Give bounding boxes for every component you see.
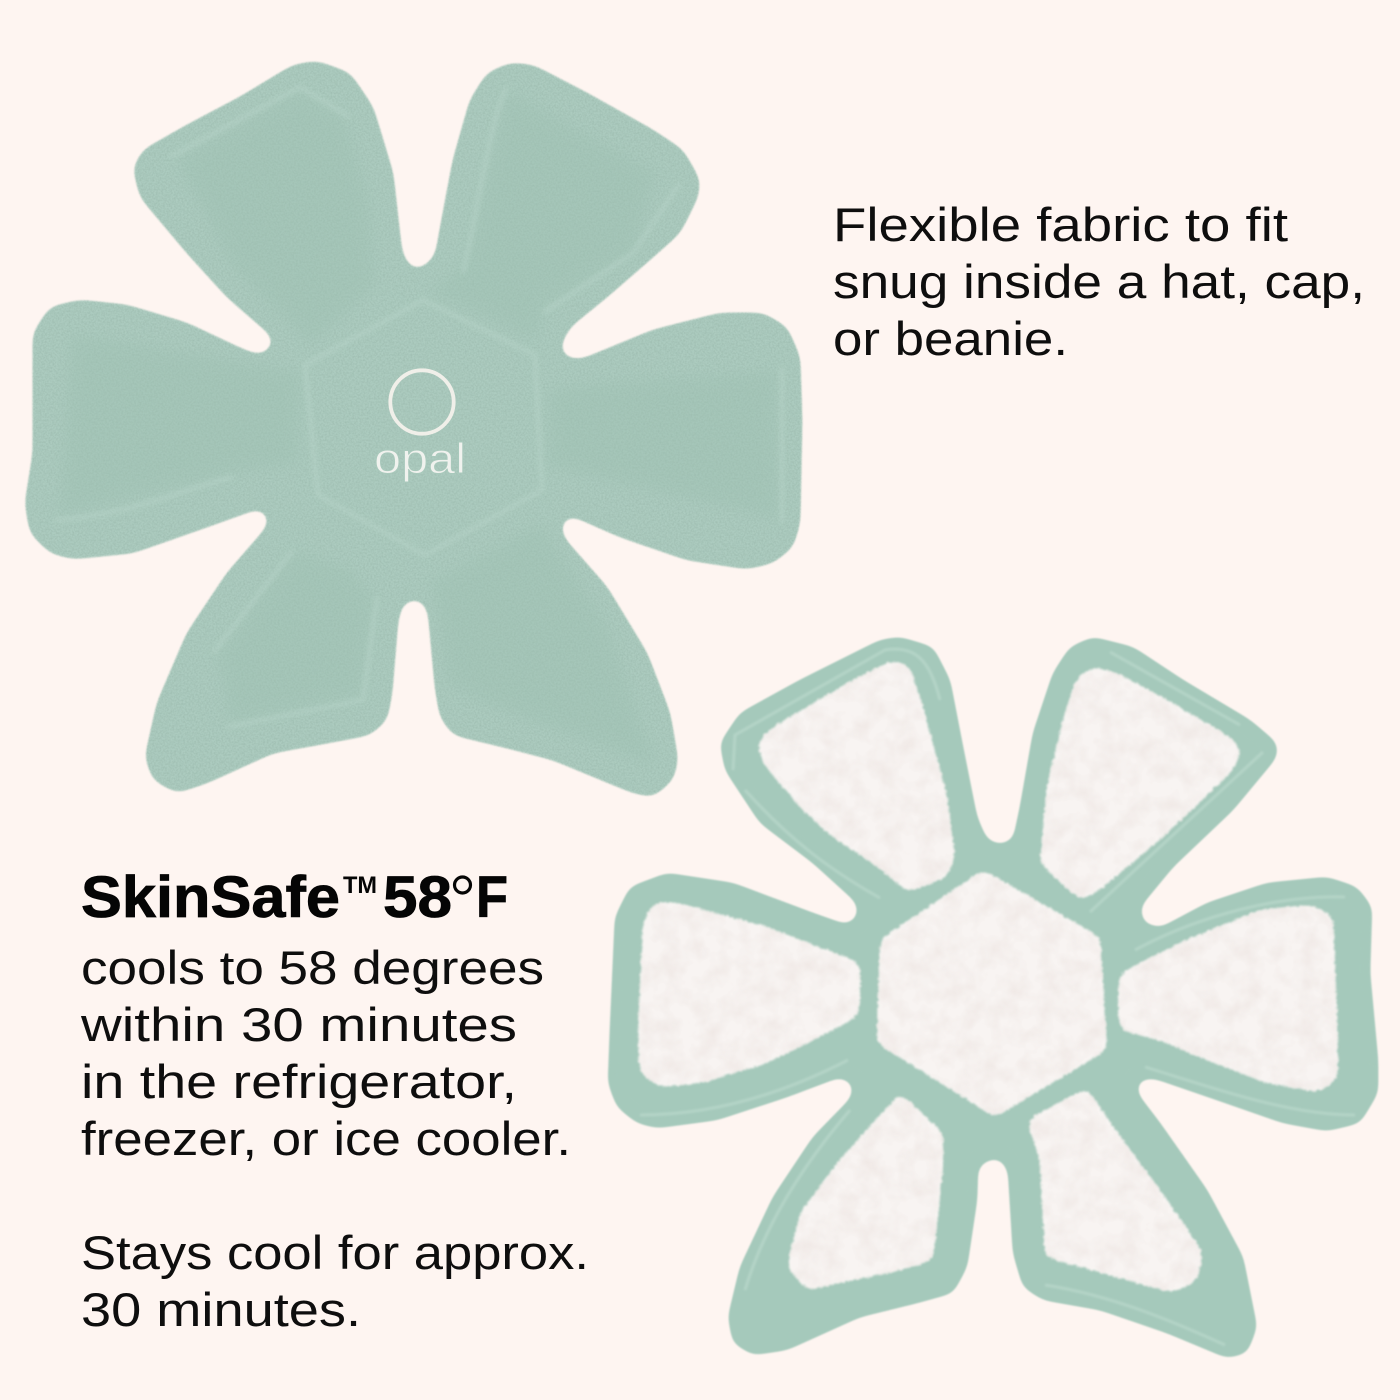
mint rim — [608, 637, 1378, 1358]
text: flexible fabric: or beanie. — [833, 312, 1068, 365]
gel fill: center hexagon — [877, 870, 1107, 1117]
fabric flower silhouette — [25, 61, 802, 797]
quilted inner panels — [60, 92, 778, 765]
text: flexible fabric — [833, 198, 1365, 365]
gel fill: top right segment — [1040, 667, 1242, 900]
gel cooling pack, back — [608, 637, 1378, 1358]
gel fill: left segment — [638, 902, 860, 1087]
text: cooling description: freezer, or ice cooler. — [81, 1112, 571, 1165]
text: cooling description — [80, 941, 571, 1165]
gel fill: bottom right segment — [1027, 1088, 1203, 1293]
text: cooling description: cools to 58 degrees — [81, 941, 544, 994]
heading: SkinSafe 58°F: 58 — [383, 865, 452, 930]
gel fill: right segment — [1118, 905, 1338, 1092]
heading: SkinSafe 58°F: F — [476, 865, 508, 930]
text: duration: Stays cool for approx. — [81, 1226, 589, 1279]
gel fill segments — [638, 660, 1338, 1293]
text: duration: 30 minutes. — [81, 1283, 361, 1336]
logo wordmark: opal — [374, 435, 466, 483]
opal logo — [374, 370, 466, 483]
heading: SkinSafe 58°F — [81, 865, 508, 930]
text: flexible fabric: snug inside a hat, cap, — [833, 255, 1365, 308]
text: duration — [81, 1226, 589, 1336]
logo ring — [390, 370, 454, 434]
gel fill: bottom left segment — [787, 1093, 943, 1290]
heading: SkinSafe 58°F: SkinSafe — [81, 865, 340, 930]
text: flexible fabric: Flexible fabric to fit — [833, 198, 1288, 251]
text: cooling description: in the refrigerator, — [81, 1055, 517, 1108]
raised seams — [55, 87, 782, 727]
rim highlights — [640, 649, 1355, 1345]
gel fill: top left segment — [757, 660, 955, 892]
text: cooling description: within 30 minutes — [80, 998, 517, 1051]
fabric cooling pack, front — [25, 61, 802, 797]
heading: SkinSafe 58°F: TM — [343, 872, 377, 899]
